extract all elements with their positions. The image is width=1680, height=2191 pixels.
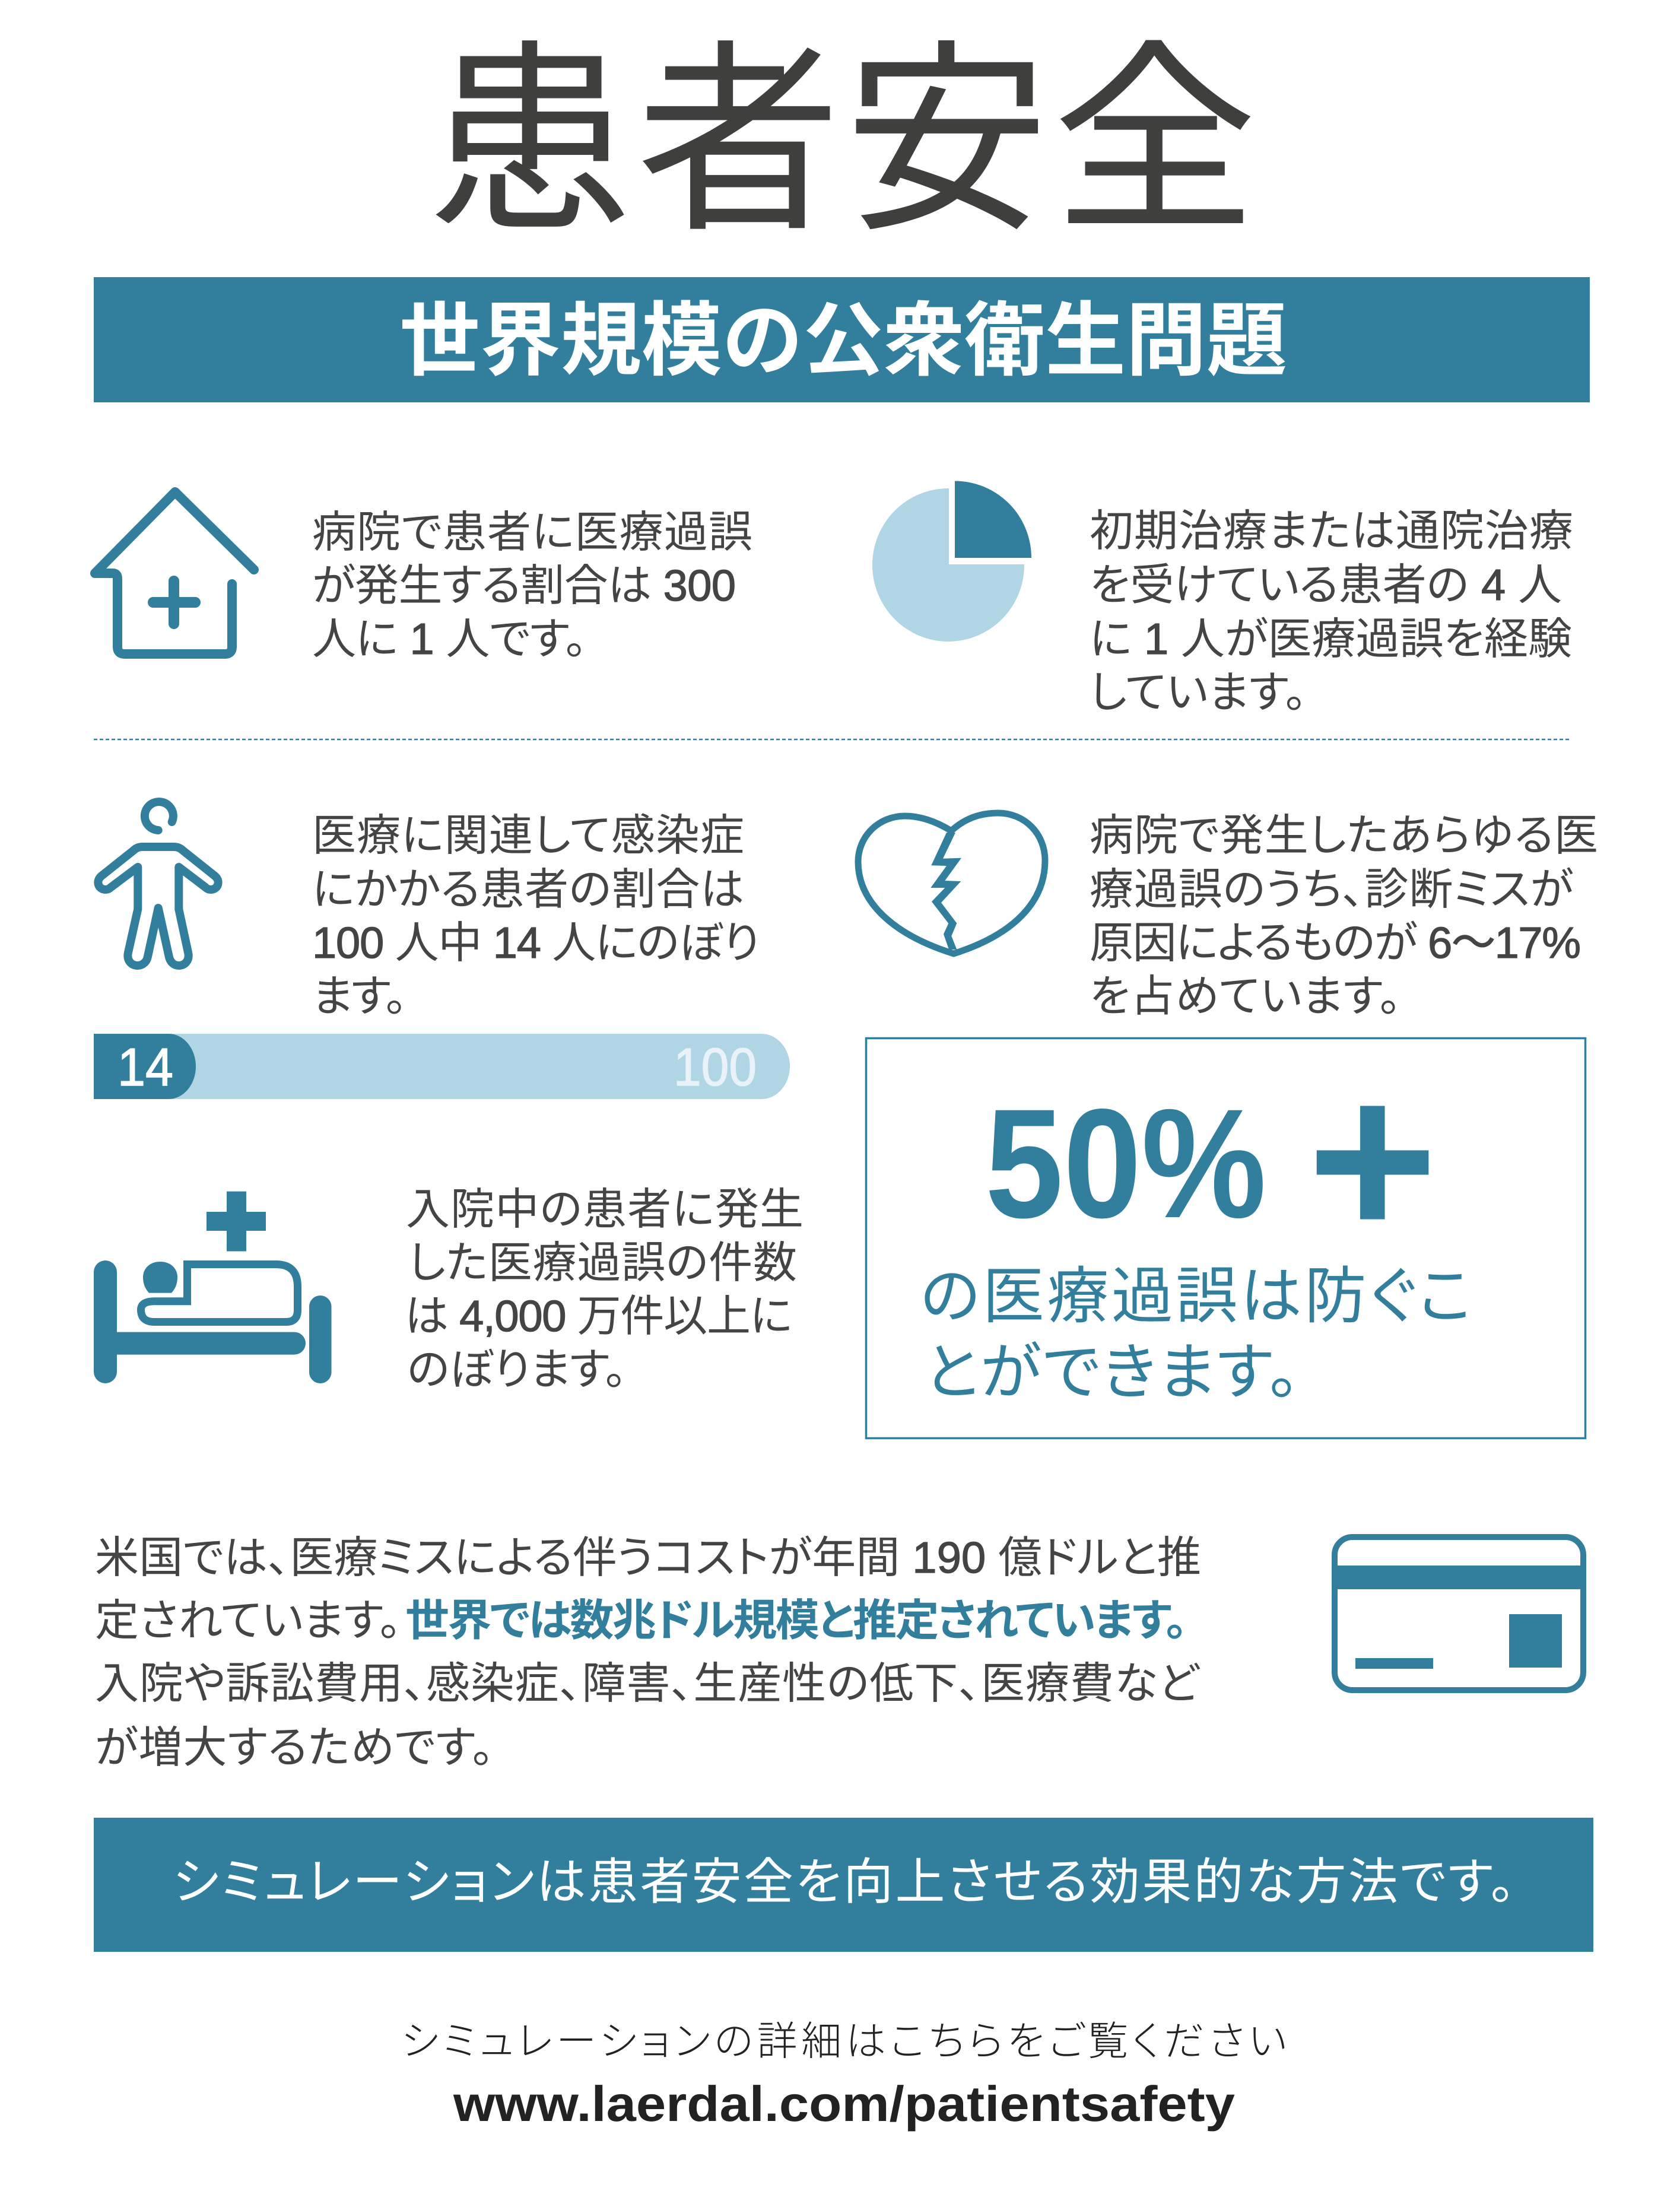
text block: 14 of 100: 医療に関連して感染症 bbox=[312, 811, 744, 860]
icon: house with cross bbox=[95, 492, 254, 654]
text block: 6 to 17 percent bbox=[1090, 811, 1598, 1021]
banner: simulation: シミュレーションは患者安全を向上させる効果的な方法です。 bbox=[173, 1854, 1515, 1910]
text block: 1 in 4: を受けている患者の 4 人 bbox=[1090, 560, 1562, 609]
text block: 40 million: した医療過誤の件数 bbox=[408, 1238, 797, 1287]
text block: 1 in 300: 人に 1 人です。 bbox=[312, 614, 587, 663]
callout: 50% preventable: とができます。 bbox=[924, 1338, 1300, 1407]
text block: 1 in 300 bbox=[312, 507, 752, 663]
text block: 1 in 4: に 1 人が医療過誤を経験 bbox=[1090, 614, 1572, 663]
header banner: 世界規模の公衆衛生問題 bbox=[399, 296, 1287, 386]
text block: costs bbox=[95, 1533, 1201, 1772]
callout: 50% preventable: の医療過誤は防ぐこ bbox=[920, 1262, 1472, 1331]
text block: 1 in 4: しています。 bbox=[1090, 668, 1307, 717]
title: 患者安全 bbox=[428, 28, 1261, 256]
text block: 40 million: 入院中の患者に発生 bbox=[406, 1185, 804, 1234]
text block: 6 to 17 percent: 病院で発生したあらゆる医 bbox=[1090, 811, 1598, 860]
callout: 50% preventable bbox=[866, 1035, 1586, 1439]
banner: simulation bbox=[94, 1818, 1593, 1952]
text block: 14 of 100: 100 人中 14 人にのぼり bbox=[312, 918, 760, 967]
stat: diagnostic errors bbox=[858, 811, 1598, 1021]
footer: シミュレーションの詳細はこちらをご覧ください bbox=[401, 2019, 1287, 2064]
bar chart: 14 of 100: 14 bbox=[117, 1038, 173, 1097]
callout: 50% preventable: 50% bbox=[985, 1077, 1266, 1250]
text block: 40 million bbox=[405, 1185, 804, 1394]
text block: 40 million: のぼります。 bbox=[407, 1345, 627, 1394]
text block: 14 of 100: にかかる患者の割合は bbox=[312, 865, 744, 914]
footer: www.laerdal.com/patientsafety bbox=[453, 2076, 1235, 2132]
icon: broken heart bbox=[858, 813, 1045, 954]
text block: 6 to 17 percent: を占めています。 bbox=[1090, 971, 1401, 1021]
text block: 14 of 100: ます。 bbox=[312, 971, 407, 1021]
text block: costs: 世界では数兆ドル規模と推定されています。 bbox=[405, 1596, 1187, 1645]
text block: 6 to 17 percent: 原因によるものが 6〜17% bbox=[1090, 918, 1581, 967]
callout: 50% preventable: + bbox=[1307, 1035, 1438, 1284]
icon: person outline bbox=[98, 802, 218, 966]
text block: costs: 入院や訴訟費用、感染症、障害、生産性の低下、医療費など bbox=[95, 1659, 1201, 1708]
text block: 1 in 300: が発生する割合は 300 bbox=[312, 561, 736, 610]
text block: 40 million: は 4,000 万件以上に bbox=[405, 1291, 792, 1341]
stat: adverse events per year bbox=[94, 1185, 804, 1394]
text block: 6 to 17 percent: 療過誤のうち、診断ミスが bbox=[1090, 865, 1573, 914]
text block: 14 of 100 bbox=[312, 811, 760, 1021]
footer bbox=[401, 2019, 1287, 2132]
text block: 1 in 4: 初期治療または通院治療 bbox=[1090, 506, 1573, 555]
divider bbox=[94, 739, 1569, 740]
bar chart: 14 of 100: 100 bbox=[674, 1038, 757, 1097]
text block: costs: が増大するためです。 bbox=[95, 1723, 494, 1772]
text block: 1 in 300: 病院で患者に医療過誤 bbox=[312, 507, 752, 557]
bar chart: 14 of 100 bbox=[94, 1034, 790, 1099]
text block: 1 in 4 bbox=[1090, 506, 1573, 717]
text block: costs: 米国では、医療ミスによる伴うコストが年間 190 億ドルと推 bbox=[95, 1533, 1201, 1582]
icon: hospital bed bbox=[94, 1192, 331, 1383]
stat: hospital errors bbox=[95, 492, 752, 663]
stat: healthcare-associated infection bbox=[98, 802, 760, 1021]
header banner bbox=[94, 277, 1590, 402]
stat: primary and outpatient care bbox=[872, 481, 1573, 717]
text block: costs: 定されています。 bbox=[95, 1596, 401, 1645]
icon: payment card bbox=[1332, 1537, 1586, 1690]
icon: pie chart one quarter bbox=[872, 481, 1031, 642]
